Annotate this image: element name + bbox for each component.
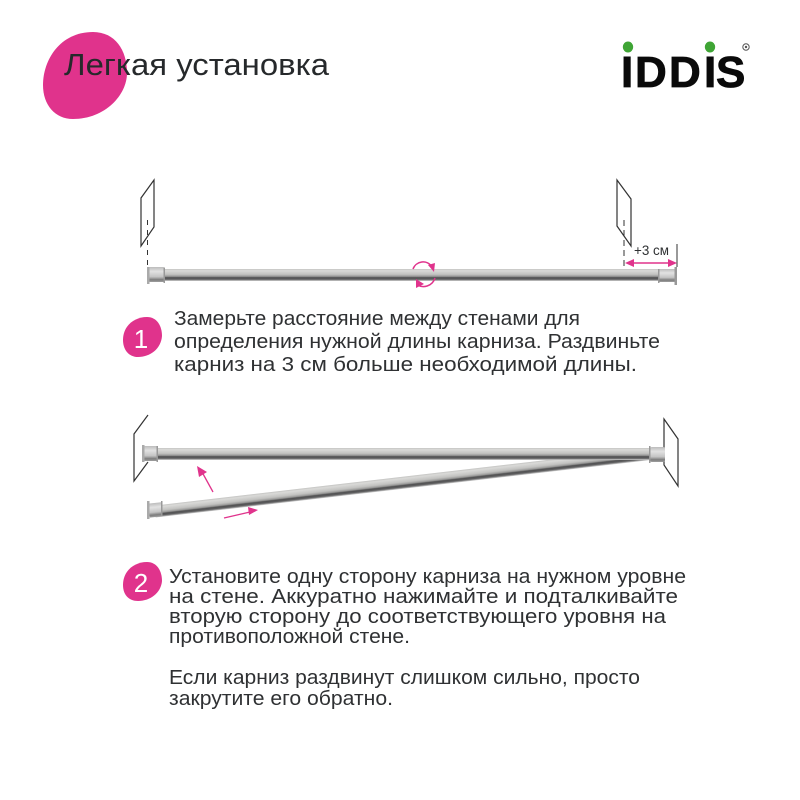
horizontal rod — [155, 448, 650, 460]
step 2 badge: 2 — [134, 568, 148, 598]
dimension label: +3 см — [634, 243, 669, 258]
right wall — [617, 180, 631, 246]
slanted rod — [154, 448, 650, 518]
left dashed line — [146, 220, 148, 270]
dimension arrow — [625, 259, 677, 267]
left cap of horizontal rod — [142, 445, 158, 462]
step 2 text: противоположной стене. — [169, 626, 410, 648]
logo: IDDIS: I — [704, 48, 716, 97]
right rod cap — [658, 267, 677, 285]
step 1 badge — [123, 317, 162, 357]
pink blob behind title — [43, 32, 127, 119]
logo: IDDIS — [621, 42, 749, 97]
step 2 text: вторую сторону до соответствующего уровня на — [169, 606, 667, 628]
left wall — [141, 180, 154, 246]
step 1 text — [174, 308, 660, 376]
rod — [160, 269, 660, 281]
right dashed line — [623, 220, 625, 268]
dimension limit line — [676, 244, 678, 267]
right wall — [664, 419, 678, 486]
diagram 2: installing the rod — [134, 415, 678, 519]
push arrow right — [224, 507, 258, 518]
step 1 text: карниз на 3 см больше необходимой длины. — [174, 354, 637, 376]
diagram 1: rod with measurement — [141, 180, 677, 288]
logo: IDDIS: I — [621, 48, 633, 97]
step 2 text: закрутите его обратно. — [169, 688, 393, 710]
step 1 badge: 1 — [134, 324, 148, 354]
left rod cap — [147, 267, 165, 284]
free end cap of slanted rod — [147, 501, 163, 519]
left wall — [134, 415, 148, 481]
step 2 text: Установите одну сторону карниза на нужном уровне — [169, 566, 686, 588]
push arrow up — [197, 466, 213, 492]
step 2 badge — [123, 562, 162, 601]
logo: IDDIS: D — [669, 48, 701, 97]
step 1 text: Замерьте расстояние между стенами для — [174, 308, 580, 330]
step 2 text — [169, 566, 686, 710]
logo: IDDIS: D — [635, 48, 667, 97]
step 2 text: на стене. Аккуратно нажимайте и подталкивайте — [169, 586, 678, 608]
step 2 text: Если карниз раздвинут слишком сильно, просто — [169, 667, 640, 689]
title: Легкая установка — [64, 47, 330, 82]
step 1 text: определения нужной длины карниза. Раздвиньте — [174, 331, 660, 353]
right cap of horizontal rod — [649, 446, 665, 463]
logo: IDDIS: S — [716, 48, 745, 97]
rotation arrows — [413, 262, 435, 288]
